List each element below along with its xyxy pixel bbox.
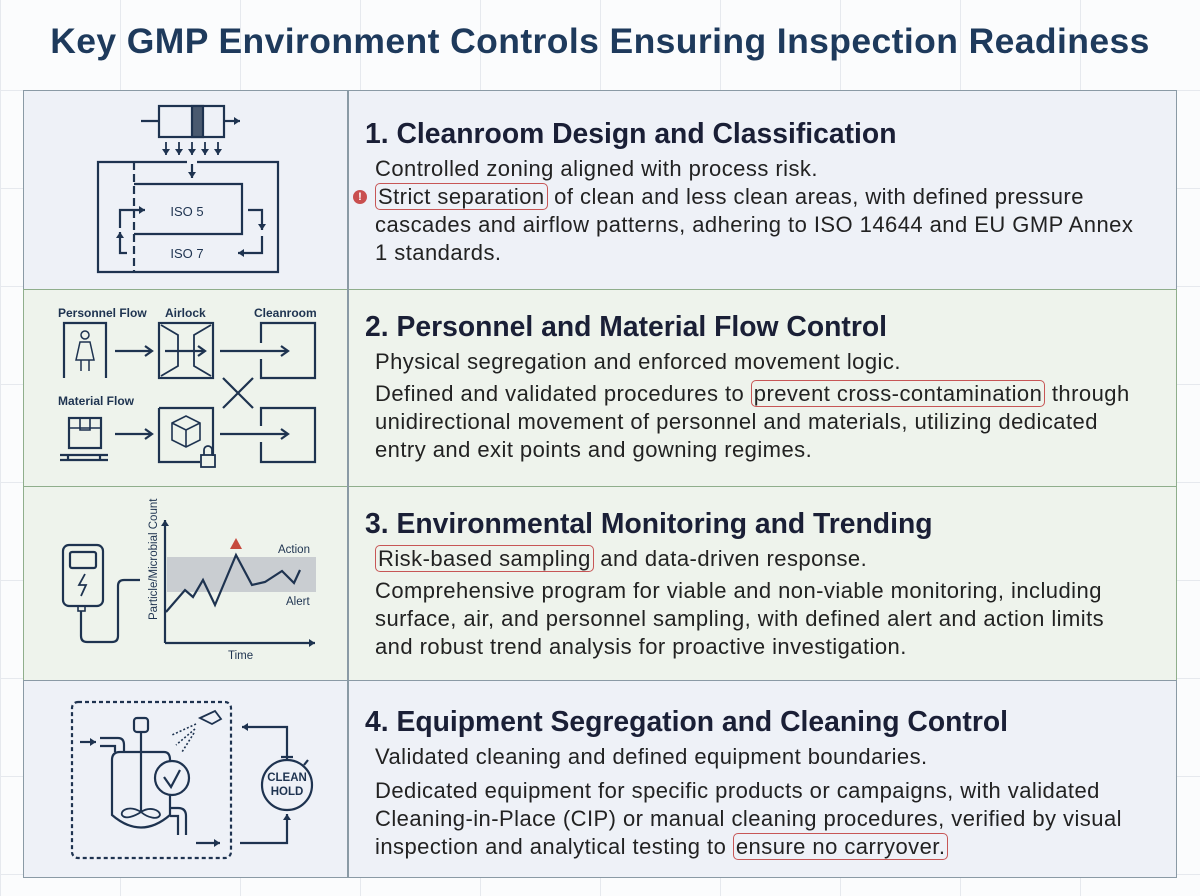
icon: monitoring chart: Alert [286,596,310,608]
text block: cleanroom design: Strict separation of clean and less clean areas, with defined pressure [378,184,1084,209]
text block: personnel and material flow: Defined and validated procedures to prevent cross-contamination through [375,381,1130,406]
icon: monitoring chart [63,498,316,662]
text block: environmental monitoring: Risk-based sampling and data-driven response. [378,546,867,571]
icon: monitoring chart: Time [228,650,253,662]
text block: environmental monitoring [365,507,1104,659]
panel: row 1 [23,90,1177,290]
text block: personnel and material flow: unidirectional movement of personnel and materials, utilizing dedicated [375,409,1098,434]
icon: equipment cleaning: HOLD [271,786,303,798]
text block: personnel and material flow [365,310,1130,462]
icon: cleanroom airflow diagram: ISO 7 [170,246,204,261]
icon: equipment cleaning [72,702,312,858]
icon: monitoring chart: Action [278,544,310,556]
text block: personnel and material flow: entry and exit points and gowning regimes. [375,437,812,462]
icon: personnel and material flow: Cleanroom [254,306,317,320]
text block: cleanroom design [353,117,1133,265]
icon: monitoring chart: Particle/Microbial Count [148,498,160,620]
text: ! [358,191,362,203]
text block: equipment segregation [365,705,1122,860]
icon: personnel and material flow: Airlock [165,306,206,320]
text block: equipment segregation: inspection and analytical testing to ensure no carryover. [375,834,945,859]
icon: cleanroom airflow diagram [98,106,278,272]
text block: cleanroom design: 1 standards. [375,240,501,265]
panel: row 4 [23,680,1177,878]
title: Key GMP Environment Controls Ensuring Inspection Readiness [50,21,1150,61]
text block: equipment segregation: Dedicated equipment for specific products or campaigns, with validated [375,778,1100,803]
text block: cleanroom design: Controlled zoning aligned with process risk. [375,156,818,181]
text block: environmental monitoring: 3. Environmental Monitoring and Trending [365,507,933,539]
text block: equipment segregation: 4. Equipment Segregation and Cleaning Control [365,705,1008,737]
text block: environmental monitoring: and robust trend analysis for proactive investigation. [375,634,907,659]
text block: cleanroom design: cascades and airflow patterns, adhering to ISO 14644 and EU GMP Annex [375,212,1133,237]
text block: environmental monitoring: surface, air, and personnel sampling, with defined alert and action limits [375,606,1104,631]
icon: personnel and material flow [58,306,317,467]
text block: personnel and material flow: 2. Personnel and Material Flow Control [365,310,887,342]
icon: equipment cleaning: CLEAN [267,772,307,784]
text block: cleanroom design: 1. Cleanroom Design and Classification [365,117,896,149]
icon: personnel and material flow: Material Flow [58,394,135,408]
text block: equipment segregation: Cleaning-in-Place (CIP) or manual cleaning procedures, verified by visual [375,806,1122,831]
text block: environmental monitoring: Comprehensive program for viable and non-viable monitoring, including [375,578,1102,603]
icon: cleanroom airflow diagram: ISO 5 [170,204,204,219]
panel: row 3 [23,486,1177,681]
text block: equipment segregation: Validated cleaning and defined equipment boundaries. [375,744,928,769]
icon: personnel and material flow: Personnel Flow [58,306,147,320]
text block: personnel and material flow: Physical segregation and enforced movement logic. [375,349,901,374]
panel: row 2 [23,289,1177,487]
